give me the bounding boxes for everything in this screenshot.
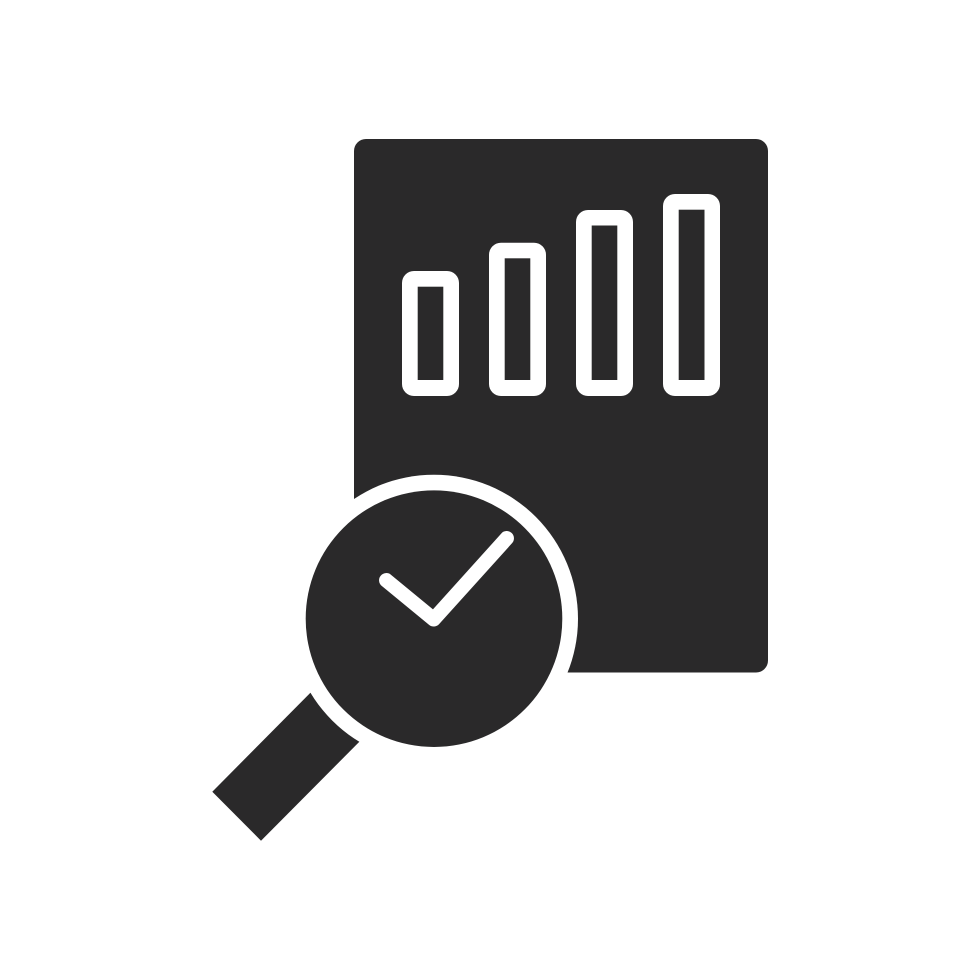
bar 2	[489, 243, 546, 396]
document page	[354, 139, 768, 672]
magnifier lens	[306, 490, 562, 747]
bar chart	[402, 194, 720, 396]
magnifier white ring	[290, 475, 578, 763]
bar 3	[576, 210, 633, 396]
check mark	[386, 538, 507, 619]
bar 1	[402, 271, 459, 396]
bar 4	[663, 194, 720, 396]
magnifier handle	[212, 673, 379, 841]
